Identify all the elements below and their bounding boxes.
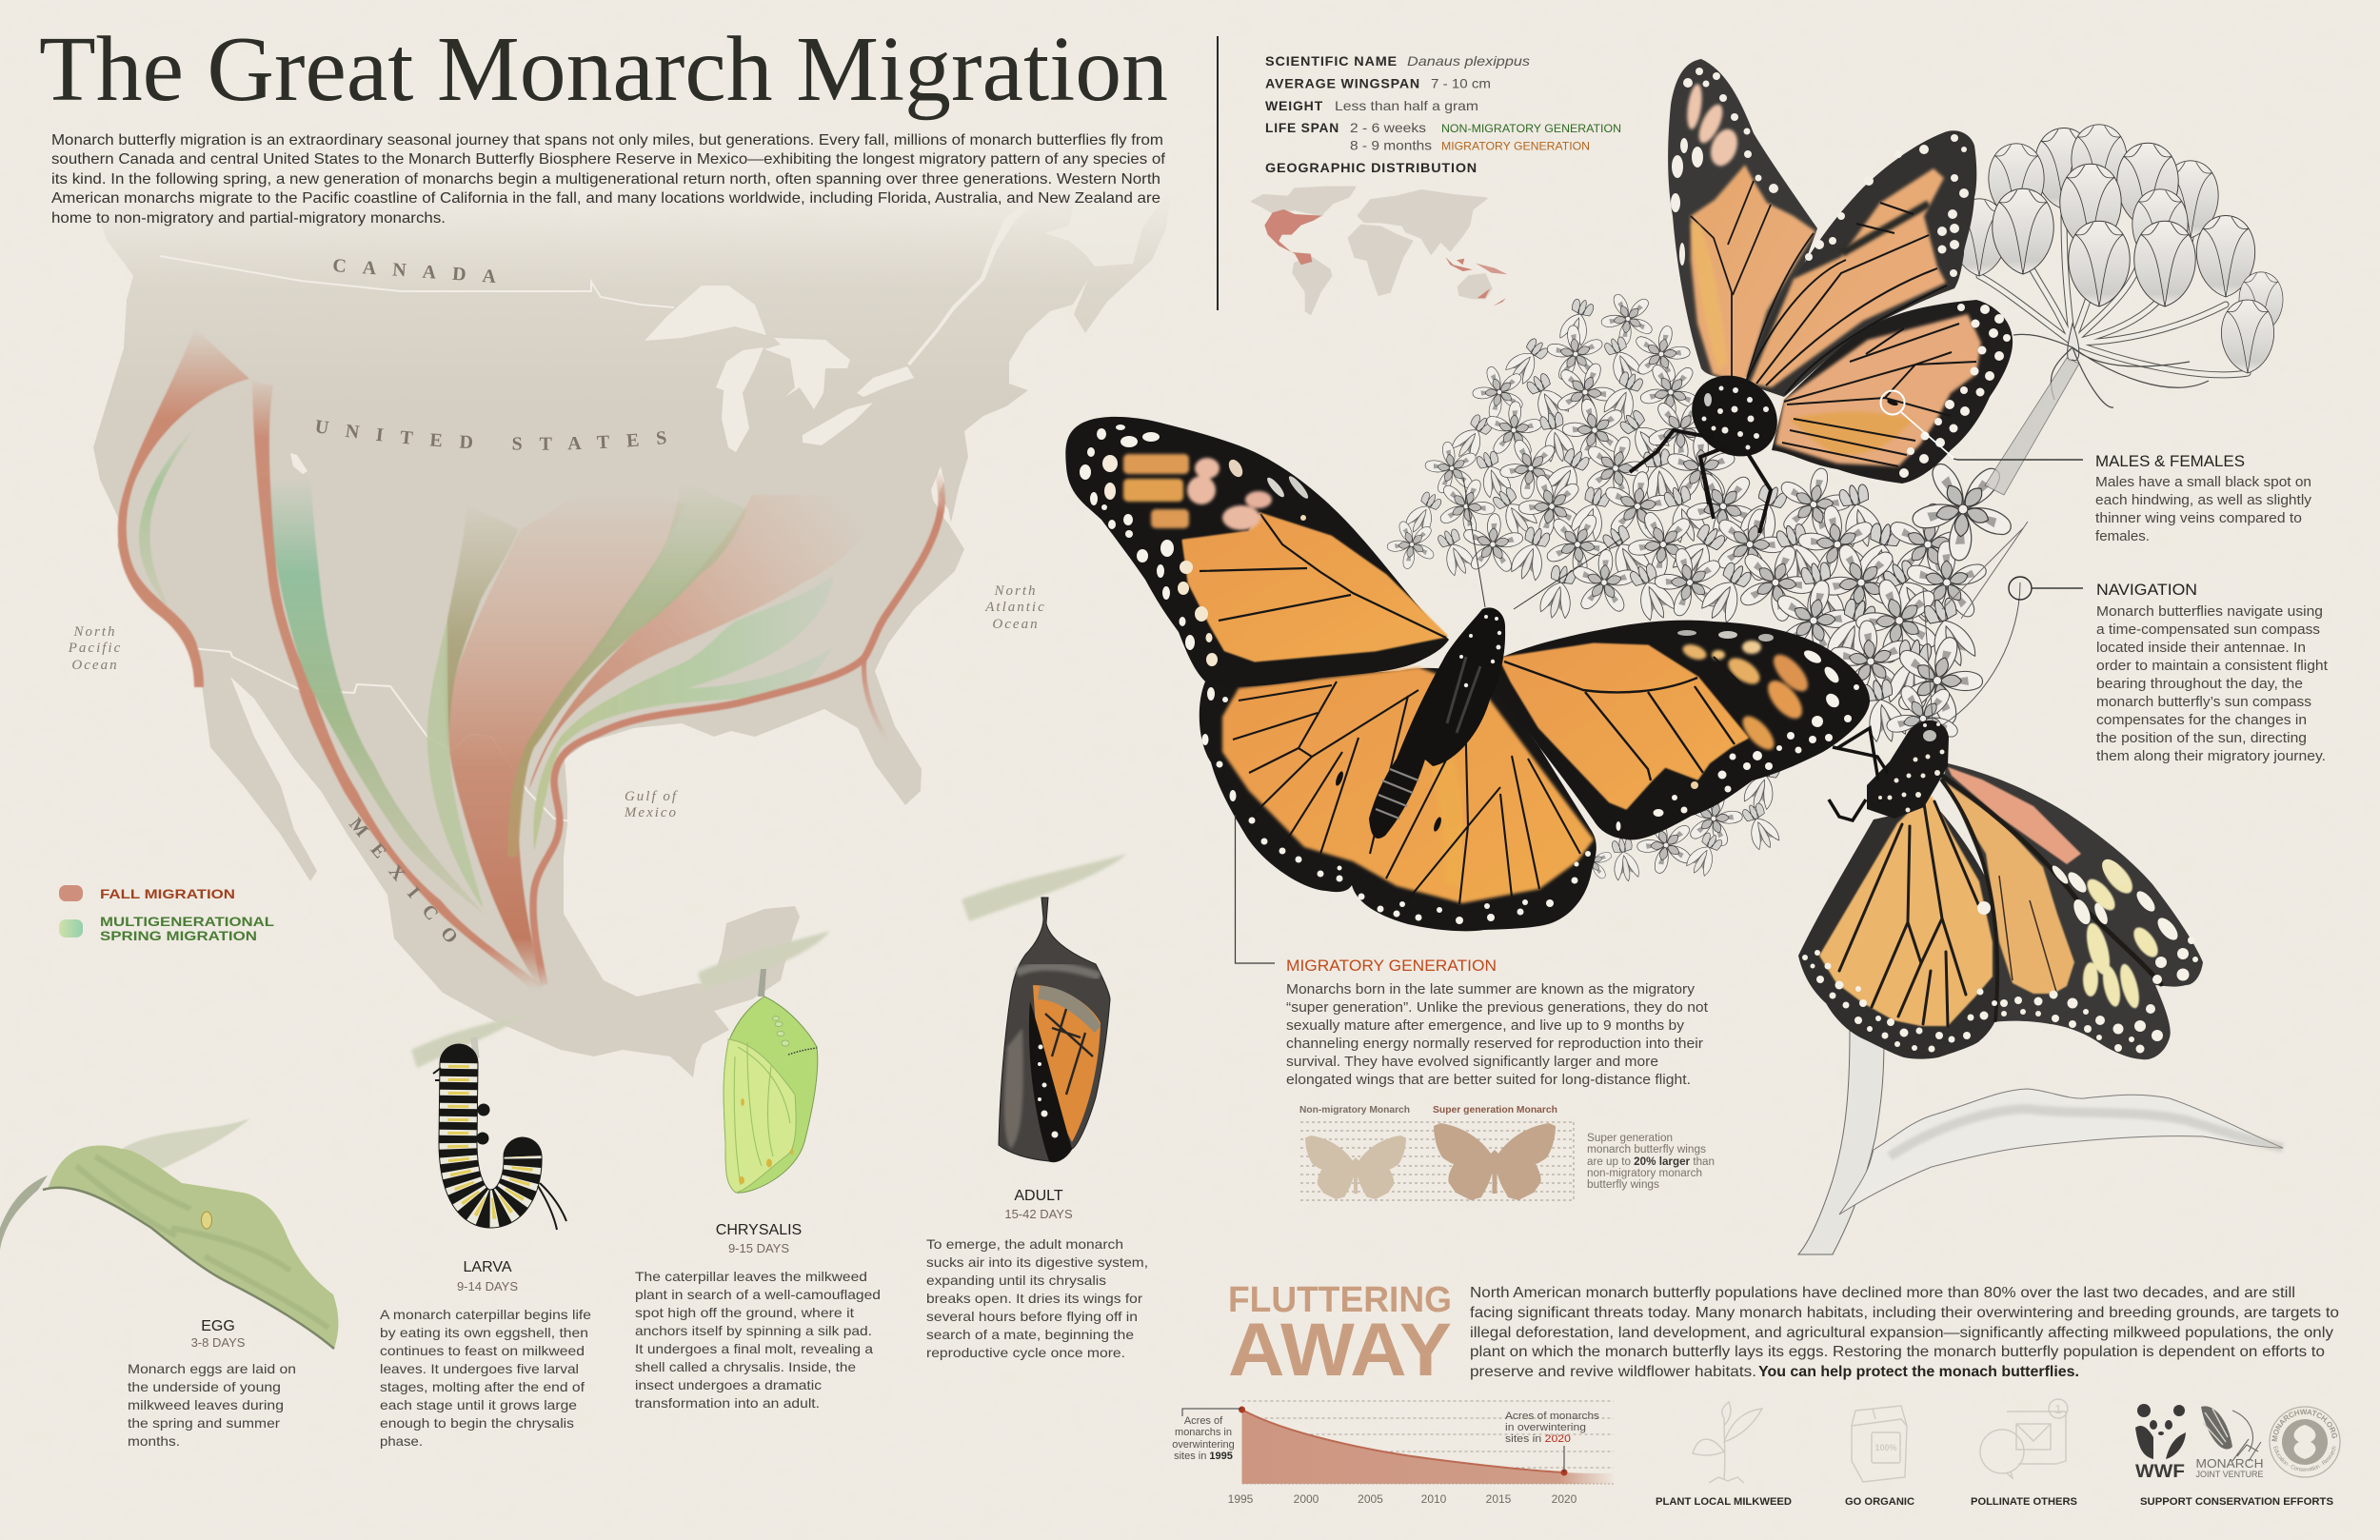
stage: adult: breaks open. It dries its wings for bbox=[926, 1291, 1142, 1306]
annotation: 1995 bbox=[1172, 1415, 1235, 1462]
icon: plant bbox=[1693, 1402, 1762, 1483]
map labels: MEXICO bbox=[345, 814, 462, 948]
stage: adult: sucks air into its digestive system, bbox=[926, 1254, 1148, 1270]
label: support conservation efforts: SUPPORT CONSERVATION EFFORTS bbox=[2140, 1496, 2333, 1508]
species facts: NON-MIGRATORY GENERATION bbox=[1441, 122, 1621, 135]
text: migratory generation: Monarchs born in the late summer are known as the migratory bbox=[1286, 981, 1696, 997]
text: navigation bbox=[2096, 581, 2328, 764]
icon: organic bag: 100% bbox=[1874, 1443, 1897, 1452]
stage: egg bbox=[128, 1318, 296, 1449]
annotation: 2020: sites in 2020 bbox=[1505, 1433, 1571, 1445]
text: males and females: Males have a small black spot on bbox=[2095, 475, 2311, 490]
stage: adult: expanding until its chrysalis bbox=[926, 1273, 1106, 1288]
stage: egg: the underside of young bbox=[128, 1379, 281, 1394]
intro text: southern Canada and central United States to the Monarch Butterfly Biosphere Reserve in Mexico—exhibiting the longest migratory pattern of any species of bbox=[51, 151, 1166, 168]
text: navigation: the position of the sun, directing bbox=[2096, 731, 2307, 746]
legend: MULTIGENERATIONAL bbox=[100, 914, 275, 929]
stage: adult: several hours before flying off in bbox=[926, 1309, 1138, 1324]
pupa branch bbox=[962, 854, 1127, 921]
conservation text: North American monarch butterfly populations have declined more than 80% over the last two decades, and are still bbox=[1470, 1285, 2295, 1301]
stage: larva: enough to begin the chrysalis bbox=[380, 1415, 574, 1431]
year axis: 2020 bbox=[1552, 1492, 1577, 1506]
text: migratory generation: “super generation”. Unlike the previous generations, they do not bbox=[1286, 999, 1709, 1016]
wing size comparison chart: are up to 20% larger than bbox=[1587, 1156, 1715, 1168]
text: navigation: located inside their antennae. In bbox=[2096, 641, 2306, 656]
larva bbox=[433, 1037, 566, 1230]
icon: super generation silhouette bbox=[1434, 1123, 1556, 1200]
stage: chrysalis: It undergoes a final molt, revealing a bbox=[635, 1341, 873, 1356]
intro text: home to non-migratory and partial-migratory monarchs. bbox=[51, 210, 446, 227]
map labels: UNITED STATES bbox=[316, 420, 666, 450]
species facts: Danaus plexippus bbox=[1407, 53, 1530, 69]
stage: adult: reproductive cycle once more. bbox=[926, 1345, 1125, 1360]
year axis: 2010 bbox=[1421, 1492, 1447, 1506]
stage: egg: Monarch eggs are laid on bbox=[128, 1361, 296, 1376]
map labels: Gulf of bbox=[625, 789, 678, 804]
species facts: MIGRATORY GENERATION bbox=[1441, 139, 1590, 152]
text: males and females: MALES & FEMALES bbox=[2095, 452, 2245, 470]
map labels: Atlantic bbox=[984, 600, 1046, 615]
right forewing bbox=[1490, 621, 1870, 839]
text: migratory generation: sexually mature after emergence, and live up to 9 months by bbox=[1286, 1017, 1685, 1034]
map labels: CANADA bbox=[332, 255, 497, 287]
text: migratory generation bbox=[1286, 957, 1709, 1088]
legend: SPRING MIGRATION bbox=[100, 928, 257, 943]
world map bbox=[1252, 188, 1507, 314]
conservation text: plant on which the monarch butterfly lays its eggs. Restoring the monarch butterfly population is dependent on efforts to bbox=[1470, 1344, 2325, 1360]
species facts bbox=[1265, 53, 1621, 175]
text: males and females: each hindwing, as well as slightly bbox=[2095, 493, 2312, 508]
callout line: migratory generation bbox=[1236, 815, 1275, 963]
thorax bbox=[1630, 359, 1793, 533]
logo: Monarch Joint Venture: JOINT VENTURE bbox=[2195, 1470, 2264, 1479]
species facts: Less than half a gram bbox=[1335, 98, 1478, 113]
stage: adult bbox=[926, 1188, 1148, 1360]
icon: messages: 1 bbox=[2054, 1402, 2062, 1416]
map labels bbox=[68, 255, 1084, 986]
wing size comparison chart: butterfly wings bbox=[1587, 1179, 1659, 1191]
big migratory butterfly bbox=[1065, 417, 1870, 931]
map labels: Mexico bbox=[624, 805, 678, 820]
logo: MonarchWatch: Education · Conservation · Research bbox=[2273, 1446, 2336, 1471]
annotation: 2020 bbox=[1505, 1411, 1600, 1445]
map labels: Ocean bbox=[71, 658, 119, 673]
species facts: AVERAGE WINGSPAN bbox=[1265, 76, 1420, 91]
text: navigation: NAVIGATION bbox=[2096, 581, 2197, 599]
wing size comparison chart: Non-migratory Monarch bbox=[1299, 1104, 1410, 1116]
callout line: males and females bbox=[1881, 390, 2083, 460]
header divider bbox=[1217, 36, 1219, 310]
map: North America bbox=[67, 124, 1180, 1077]
icon: messages bbox=[1980, 1399, 2068, 1478]
text: navigation: compensates for the changes in bbox=[2096, 713, 2307, 728]
year axis bbox=[1228, 1492, 1577, 1506]
milkweed flower cluster bbox=[1382, 289, 2028, 890]
stage: chrysalis: anchors itself by spinning a silk pad. bbox=[635, 1323, 872, 1338]
front forewing bbox=[1745, 130, 1976, 397]
stage: larva: leaves. It undergoes five larval bbox=[380, 1361, 579, 1376]
label: go organic: GO ORGANIC bbox=[1845, 1496, 1914, 1508]
left forewing bbox=[1065, 417, 1449, 686]
species facts: GEOGRAPHIC DISTRIBUTION bbox=[1265, 160, 1478, 175]
species facts: LIFE SPAN bbox=[1265, 120, 1339, 135]
wing size comparison chart: monarch butterfly wings bbox=[1587, 1144, 1706, 1155]
body bbox=[1369, 478, 1621, 839]
annotation: 1995: Acres of bbox=[1184, 1415, 1223, 1427]
intro text: American monarchs migrate to the Pacific coastline of California in the fall, and many locations worldwide, including Florida, Australia, and New Zealand are bbox=[51, 190, 1160, 207]
legend bbox=[59, 885, 275, 943]
logo: WWF bbox=[2135, 1404, 2186, 1482]
wing size comparison chart: non-migratory monarch bbox=[1587, 1168, 1702, 1179]
conservation text: preserve and revive wildflower habitats. bbox=[1470, 1364, 1756, 1380]
annotation: 1995: overwintering bbox=[1172, 1439, 1235, 1451]
stage: larva: phase. bbox=[380, 1433, 423, 1449]
stage: chrysalis: CHRYSALIS bbox=[716, 1222, 802, 1238]
icon: organic bag bbox=[1852, 1406, 1907, 1482]
year axis: 2000 bbox=[1294, 1492, 1319, 1506]
map labels: North bbox=[72, 624, 117, 640]
larva branch bbox=[411, 1014, 528, 1068]
stage: chrysalis: insect undergoes a dramatic bbox=[635, 1377, 822, 1392]
stage: adult: search of a mate, beginning the bbox=[926, 1327, 1134, 1342]
label: pollinate others: POLLINATE OTHERS bbox=[1971, 1496, 2077, 1508]
stage: larva bbox=[380, 1259, 591, 1449]
stage: larva: 9-14 DAYS bbox=[457, 1279, 518, 1293]
heading: fluttering away: FLUTTERING bbox=[1228, 1280, 1452, 1320]
stage: chrysalis: plant in search of a well-camouflaged bbox=[635, 1287, 881, 1302]
text: migratory generation: MIGRATORY GENERATION bbox=[1286, 957, 1497, 975]
logo: WWF: WWF bbox=[2135, 1462, 2185, 1482]
label: plant local milkweed: PLANT LOCAL MILKWEED bbox=[1656, 1496, 1792, 1508]
stage: chrysalis: shell called a chrysalis. Inside, the bbox=[635, 1359, 856, 1374]
icon: non-migratory silhouette bbox=[1305, 1135, 1406, 1199]
text: males and females bbox=[2095, 452, 2312, 544]
conservation text: facing significant threats today. Many monarch habitats, including their overwintering and breeding grounds, are targets to bbox=[1470, 1305, 2339, 1321]
species facts: WEIGHT bbox=[1265, 98, 1323, 113]
stage: larva: continues to feast on milkweed bbox=[380, 1343, 585, 1358]
annotation: 1995: monarchs in bbox=[1175, 1427, 1232, 1438]
text: males and females: thinner wing veins compared to bbox=[2095, 511, 2302, 526]
conservation text: You can help protect the monach butterflies. bbox=[1758, 1364, 2079, 1380]
wing size comparison chart: Super generation Monarch bbox=[1433, 1104, 1557, 1116]
stage: chrysalis: spot high off the ground, where it bbox=[635, 1305, 854, 1320]
stage: egg: milkweed leaves during bbox=[128, 1397, 284, 1412]
intro text bbox=[51, 132, 1166, 227]
species facts: SCIENTIFIC NAME bbox=[1265, 53, 1398, 69]
rear forewing bbox=[1668, 59, 1817, 384]
annotation: 2020: Acres of monarchs bbox=[1505, 1411, 1600, 1422]
logo: MonarchWatch bbox=[2269, 1406, 2341, 1478]
logo: MonarchWatch: MONARCHWATCH.ORG bbox=[2271, 1409, 2337, 1441]
stage: larva: stages, molting after the end of bbox=[380, 1379, 585, 1394]
stage: egg: 3-8 DAYS bbox=[191, 1335, 246, 1350]
stage: adult: To emerge, the adult monarch bbox=[926, 1236, 1123, 1252]
annotation: 1995: sites in 1995 bbox=[1174, 1451, 1233, 1462]
callout line: navigation bbox=[2009, 577, 2083, 600]
stage: egg: the spring and summer bbox=[128, 1415, 280, 1431]
adult chrysalis bbox=[999, 898, 1110, 1162]
area chart: decline 1995 to 2020 bbox=[1172, 1401, 1614, 1506]
text: migratory generation: survival. They have evolved significantly larger and more bbox=[1286, 1054, 1658, 1070]
stage: larva: each stage until it grows large bbox=[380, 1397, 577, 1412]
species facts: 7 - 10 cm bbox=[1431, 76, 1491, 91]
lower right butterfly bbox=[1798, 582, 2203, 1059]
annotation: 2020: in overwintering bbox=[1505, 1422, 1586, 1433]
title: The Great Monarch Migration bbox=[39, 18, 1168, 121]
wing size comparison chart: Super generation bbox=[1587, 1133, 1673, 1144]
map labels: Ocean bbox=[992, 617, 1040, 632]
year axis: 1995 bbox=[1228, 1492, 1254, 1506]
text: navigation: bearing throughout the day, the bbox=[2096, 677, 2303, 692]
hindwings bbox=[1200, 667, 1597, 931]
migration routes bbox=[118, 328, 942, 988]
stage: chrysalis bbox=[635, 1222, 881, 1411]
wing size comparison chart bbox=[1299, 1104, 1715, 1200]
conservation text bbox=[1470, 1285, 2339, 1380]
milkweed stem and leaf bbox=[1798, 1031, 2283, 1254]
stage: larva: by eating its own eggshell, then bbox=[380, 1325, 588, 1340]
text: navigation: Monarch butterflies navigate using bbox=[2096, 604, 2323, 620]
text: navigation: a time-compensated sun compass bbox=[2096, 622, 2320, 638]
stage: chrysalis: 9-15 DAYS bbox=[728, 1241, 789, 1255]
stage: larva: A monarch caterpillar begins life bbox=[380, 1307, 591, 1322]
chrysalis bbox=[724, 969, 818, 1193]
milkweed buds bbox=[1952, 125, 2283, 495]
icon: egg bbox=[202, 1212, 211, 1229]
stage: adult: ADULT bbox=[1014, 1188, 1063, 1204]
stage: chrysalis: The caterpillar leaves the milkweed bbox=[635, 1269, 867, 1284]
legend: FALL MIGRATION bbox=[100, 886, 235, 901]
map labels: North bbox=[993, 583, 1038, 599]
logo: Monarch Joint Venture: MONARCH bbox=[2195, 1456, 2264, 1471]
intro text: Monarch butterfly migration is an extraordinary seasonal journey that spans not only miles, but generations. Every fall, millions of monarch butterflies fly from bbox=[51, 132, 1163, 148]
thorax and head bbox=[1829, 721, 1949, 820]
egg leaf bbox=[0, 1118, 338, 1349]
conservation text: illegal deforestation, land development, and agricultural expansion—significantly affecting milkweed populations, the only bbox=[1470, 1325, 2333, 1341]
stage: chrysalis: transformation into an adult. bbox=[635, 1395, 820, 1411]
top right butterfly bbox=[1630, 59, 2013, 533]
year axis: 2005 bbox=[1358, 1492, 1383, 1506]
text: navigation: order to maintain a consistent flight bbox=[2096, 659, 2328, 674]
text: navigation: monarch butterfly’s sun compass bbox=[2096, 695, 2311, 710]
stage: egg: EGG bbox=[201, 1318, 235, 1334]
text: males and females: females. bbox=[2095, 529, 2150, 544]
stage: egg: months. bbox=[128, 1433, 180, 1449]
text: migratory generation: elongated wings that are better suited for long-distance flight. bbox=[1286, 1072, 1691, 1088]
antennae bbox=[1923, 582, 2020, 725]
text: migratory generation: channeling energy normally reserved for reproduction into their bbox=[1286, 1036, 1703, 1052]
stage: larva: LARVA bbox=[463, 1259, 512, 1275]
chrysalis branch bbox=[698, 931, 830, 990]
logo: Monarch Joint Venture bbox=[2195, 1406, 2264, 1479]
year axis: 2015 bbox=[1486, 1492, 1512, 1506]
stage: adult: 15-42 DAYS bbox=[1004, 1207, 1073, 1221]
species facts: 2 - 6 weeks bbox=[1350, 120, 1426, 135]
text: navigation: them along their migratory journey. bbox=[2096, 749, 2326, 764]
heading: fluttering away: AWAY bbox=[1228, 1307, 1452, 1392]
hindwing bbox=[1772, 300, 2013, 484]
map labels: Pacific bbox=[68, 641, 122, 656]
intro text: its kind. In the following spring, a new generation of monarchs begin a multigenerational return north, often spanning over three generations. Western North bbox=[51, 171, 1160, 188]
species facts: 8 - 9 months bbox=[1350, 137, 1432, 152]
